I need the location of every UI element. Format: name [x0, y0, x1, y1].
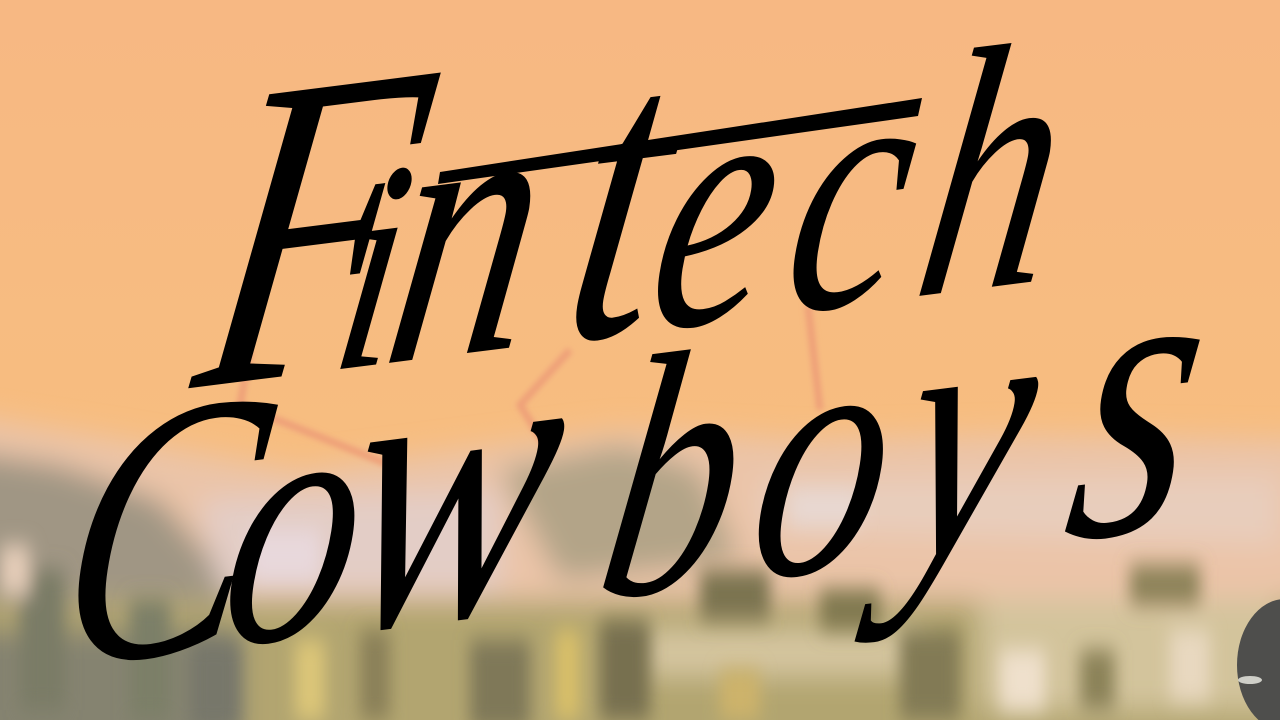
title line: Fintech: [188, 43, 1051, 388]
title line: Cowboys: s: [1046, 158, 1237, 630]
background: blurred sunset landscape: [0, 306, 1280, 720]
title line: Fintech: i: [318, 97, 431, 435]
title: [78, 43, 1200, 660]
title line: Cowboys: y: [851, 216, 1067, 646]
title line: Cowboys: o: [202, 319, 394, 720]
title line: Cowboys: o: [731, 252, 922, 657]
icon: dark round shape at right edge: [1237, 599, 1280, 720]
title line: Cowboys: b: [580, 271, 772, 676]
title line: Fintech: e: [631, 4, 808, 407]
title line: Cowboys: w: [319, 239, 597, 720]
title line: Fintech: n: [366, 7, 574, 447]
